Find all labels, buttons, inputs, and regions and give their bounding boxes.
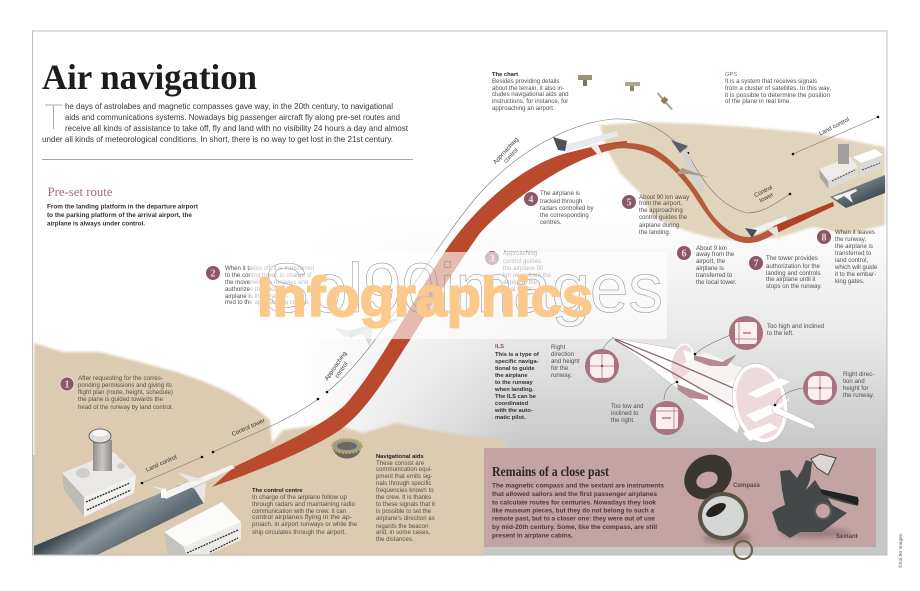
GPS note: it is possible to determine the position: [725, 92, 830, 99]
image credit: ©Sol 90 Images: [897, 533, 904, 568]
GPS note: GPS: [725, 72, 737, 78]
navigational aids note: These consist are: [376, 460, 425, 467]
step 6: away from the: [696, 251, 735, 258]
step 3: [485, 250, 552, 293]
step 8: 8: [822, 232, 826, 244]
airplane: descending: [671, 140, 708, 193]
ILS caption: right direction: Right: [551, 344, 566, 351]
navigational aids note: the crew. It is thanks: [376, 494, 431, 501]
GPS note: [725, 72, 831, 105]
runway: departure: [34, 485, 204, 555]
step 8: transferred to: [835, 250, 872, 257]
step 1: ponding permissions and giving its: [78, 382, 172, 389]
step 7: stops on the runway.: [766, 283, 822, 290]
ILS caption: right direction far: tion and: [843, 378, 865, 385]
step 5: the approaching: [639, 207, 683, 214]
navigational aids note: and, in some cases,: [376, 529, 431, 536]
step 7: 7: [754, 258, 758, 270]
pre-set route text: airplane is always under control.: [47, 222, 145, 228]
step 2: airplane is then transfe-: [225, 293, 289, 300]
terminal building: departure: [164, 502, 241, 555]
ILS caption: too low: Too low and: [611, 403, 644, 410]
intro text: receive all kinds of assistance to take off, fly and land with no visibility 24 hours a day and almost: [65, 124, 409, 133]
step 1: the plane is guided towards the: [78, 396, 164, 403]
ILS note: to the runway: [495, 380, 533, 386]
watermark: Sol90images: [263, 249, 663, 327]
the chart note: instructions, for instance, for: [492, 98, 568, 105]
GPS note: of the plane in real time.: [725, 98, 791, 105]
flight route ribbon: [212, 141, 834, 487]
panel text: remote past, but to a closer one: they were out of use: [492, 516, 655, 522]
step 3: local tower.: [503, 286, 534, 293]
ILS caption: right direction far: [843, 371, 874, 399]
GPS note: It is a system that receives signals: [725, 78, 817, 85]
airplane: approach, top: [553, 131, 618, 156]
ILS caption: right direction far: height for: [843, 385, 868, 392]
panel text: [492, 482, 664, 540]
ILS indicator: right direction: [585, 349, 619, 383]
sextant label: Sextant: [836, 534, 858, 540]
navigational aids note: [376, 454, 435, 543]
step 7: landing and controls: [766, 270, 821, 277]
step 8: it to the embar-: [835, 271, 876, 278]
ILS indicator: too low: [650, 401, 684, 435]
control centre note: communication with the crew. It can: [252, 508, 346, 515]
step 3: the airplane 90: [503, 265, 544, 272]
ILS caption: right direction far: Right direc-: [843, 371, 874, 378]
ILS caption: too high: Too high and inclined: [767, 323, 824, 330]
airport buildings: arrival: [819, 144, 883, 189]
step 6: the local tower.: [696, 279, 737, 286]
watermark: Infographics: [257, 265, 593, 328]
ILS note: This is a type of: [495, 352, 539, 358]
step 8: [817, 229, 878, 285]
control centre note: ship circulates through the airport.: [252, 529, 346, 536]
panel text: The magnetic compass and the sextant are instruments: [492, 482, 664, 490]
step 3: Approaching: [503, 250, 537, 257]
GPS note: from a cluster of satellites. In this way,: [725, 85, 831, 92]
step 6: airport, the: [696, 258, 726, 265]
route label: approaching control right: control: [503, 147, 520, 165]
route label: approaching control left: Approaching: [324, 351, 348, 382]
step 2: 2: [210, 268, 216, 280]
step 8: the runway,: [835, 236, 866, 243]
navigational aids note: the distances.: [376, 536, 414, 543]
step 4: tracked through: [540, 198, 582, 205]
step 1: After requesting for the corres-: [78, 375, 163, 382]
sextant: [772, 454, 859, 538]
navigational aids note: is possible to set the: [376, 508, 432, 515]
step 8: land control,: [835, 257, 869, 264]
navigational aids note: nals through specific: [376, 480, 432, 487]
pre-set route text: From the landing platform in the departure airport: [47, 204, 198, 210]
ILS note: coordinated: [495, 401, 529, 407]
navigational aids note: frequencies known to: [376, 487, 434, 494]
step 2: When it takes off, it is transferred: [225, 265, 314, 272]
ILS caption: right direction: runway.: [551, 372, 572, 379]
panel: remains of a close past: [484, 445, 876, 559]
step 5: the landing.: [639, 229, 671, 236]
navigational aid beacon: [332, 439, 362, 458]
intro text: under all kinds of meteorological conditions. In short, there is no way to get lost in the 21st century.: [42, 135, 393, 144]
ILS caption: too low: the right.: [611, 417, 635, 424]
land: departure side: [34, 343, 505, 555]
ILS note: specific naviga-: [495, 359, 539, 365]
step 7: the airplane until it: [766, 276, 816, 283]
ILS caption: too high: to the left.: [767, 330, 794, 337]
step 2: to the control tower, in charge of: [225, 272, 312, 279]
ILS caption: right direction: and height: [551, 358, 580, 365]
the chart note: [492, 72, 569, 112]
the chart note: about the terrain, it also in-: [492, 85, 564, 92]
step 6: 6: [682, 248, 686, 260]
drop cap: [45, 105, 62, 129]
step 6: [677, 245, 737, 286]
pre-set route text: [47, 204, 198, 228]
step 5: About 90 km away: [639, 194, 690, 201]
step 8: the airplane is: [835, 243, 873, 250]
control tower building: departure: [62, 429, 136, 517]
ILS note: [494, 344, 539, 421]
ILS note: ILS: [495, 344, 504, 350]
runway: arrival: [830, 175, 885, 208]
the chart note: cludes navigational aids and: [492, 91, 569, 98]
step 1: 1: [64, 380, 70, 390]
route label: control tower left: Control tower: [231, 418, 266, 438]
route label: approaching control right: Approaching: [493, 137, 520, 166]
step 8: When it leaves: [835, 229, 875, 236]
airplane: mid climb, faded: [333, 318, 398, 346]
step 8: king gates.: [835, 278, 865, 285]
land: arrival side: [600, 122, 885, 241]
navigational aids note: Navigational aids: [376, 454, 424, 460]
intro text: he days of astrolabes and magnetic compasses gave way, in the 20th century, to navigational: [65, 102, 393, 111]
control centre note: proach, in airport runways or while the: [252, 521, 358, 528]
compass label: Compass: [733, 483, 761, 489]
step 2: [206, 265, 314, 306]
step 7: authorization for the: [766, 263, 820, 270]
panel text: that allowed sailors and the first passenger airplanes: [492, 491, 657, 498]
navigational aids note: pment that emits sig-: [376, 473, 433, 480]
step 4: The airplane is: [540, 190, 580, 197]
ILS indicator: right direction, far: [803, 371, 837, 405]
intro text: [42, 102, 409, 144]
panel heading: Remains of a close past: [492, 464, 609, 479]
ILS caption: right direction: for the: [551, 365, 569, 372]
step 3: airport to the: [503, 279, 538, 286]
control centre note: The control centre: [252, 488, 303, 494]
step 3: km away from the: [503, 272, 552, 279]
step 1: flight plan (route, height, schedule): [78, 389, 173, 396]
step 1: head of the runway by land control.: [78, 404, 173, 411]
control centre note: In charge of the airplane follow up: [252, 494, 348, 501]
panel text: to calculate routes for centuries. Nowadays they look: [492, 500, 656, 506]
route label: control tower right: tower: [759, 192, 775, 204]
ILS note: The ILS can be: [495, 394, 537, 400]
route label: approaching control left: control: [334, 361, 350, 380]
step 3: 3: [490, 254, 494, 264]
step 6: About 9 km: [696, 245, 727, 252]
pre-set route heading: Pre-set route: [48, 185, 113, 199]
control centre note: control airplanes flying in the ap-: [252, 514, 352, 521]
control centre note: [252, 488, 358, 536]
step 7: The tower provides: [766, 255, 818, 262]
navigational aids note: regards the beacon: [376, 523, 429, 530]
step 7: [749, 255, 822, 290]
ILS caption: too high: [767, 323, 824, 337]
navigational aids note: communication equi-: [376, 466, 432, 473]
ILS note: with the auto-: [494, 408, 533, 414]
ILS caption: right direction: direction: [551, 351, 574, 358]
step 2: the movement on runways and: [225, 279, 308, 286]
step 4: 4: [528, 194, 534, 206]
the chart note: Besides providing details: [492, 78, 559, 85]
satellites: [578, 75, 673, 110]
airplane: taking off: [151, 465, 235, 504]
the chart note: approaching an airport.: [492, 105, 555, 112]
step 5: from the airport,: [639, 200, 682, 207]
ILS note: the airplane: [495, 373, 528, 379]
ILS caption: right direction: [551, 344, 580, 379]
step 4: centres.: [540, 219, 562, 226]
route label: land control left: Land control: [145, 455, 178, 474]
route guide line: [141, 116, 879, 484]
step 1: [60, 375, 173, 411]
ILS indicator: too high: [729, 316, 763, 350]
step 4: radars controlled by: [540, 205, 594, 212]
navigational aids note: airplane's direction as: [376, 515, 435, 522]
step 8: which will guide: [834, 264, 878, 271]
step 5: control guides the: [639, 214, 688, 221]
panel text: like museum pieces, but they do not belong to such a: [492, 508, 654, 514]
step 3: control guides: [503, 258, 541, 265]
ILS caption: too low: inclined to: [611, 410, 639, 417]
intro text: aids and communications systems. Nowadays big passenger aircraft fly along pre-set routes and: [65, 113, 400, 122]
step 6: airplane is: [696, 265, 724, 272]
ILS caption: too low: [611, 403, 644, 424]
title: Air navigation: [42, 57, 257, 97]
compass: [675, 445, 752, 559]
step 4: [524, 190, 594, 226]
step 2: rred to the approaching control.: [225, 299, 310, 306]
ILS note: matic pilot.: [495, 415, 526, 421]
the chart note: The chart: [492, 72, 518, 78]
pre-set route text: to the parking platform of the arrival airport, the: [47, 213, 193, 219]
navigational aids note: to these signals that it: [376, 501, 435, 508]
panel text: present in airplane cabins.: [492, 532, 573, 540]
panel text: by mid-20th century. Some, like the compass, are still: [492, 524, 657, 531]
ILS beam diagram: [603, 335, 816, 448]
step 5: 5: [626, 198, 632, 208]
airplane: landing: [745, 216, 787, 240]
ILS note: when landing.: [494, 387, 534, 393]
step 2: authorizes the take-off. The: [225, 286, 300, 293]
route label: land control right: Land control: [818, 117, 851, 137]
ILS caption: right direction far: the runway.: [843, 392, 874, 399]
step 6: transferred to: [696, 272, 733, 279]
control centre note: through radars and maintaining radio: [252, 501, 356, 508]
step 5: airplane during: [639, 222, 679, 229]
step 5: [622, 194, 690, 236]
airplane: on runway, arrival: [833, 189, 857, 203]
route label: control tower right: Control: [754, 185, 774, 199]
ILS note: tional to guide: [495, 366, 535, 372]
step 4: the corresponding: [540, 212, 589, 219]
